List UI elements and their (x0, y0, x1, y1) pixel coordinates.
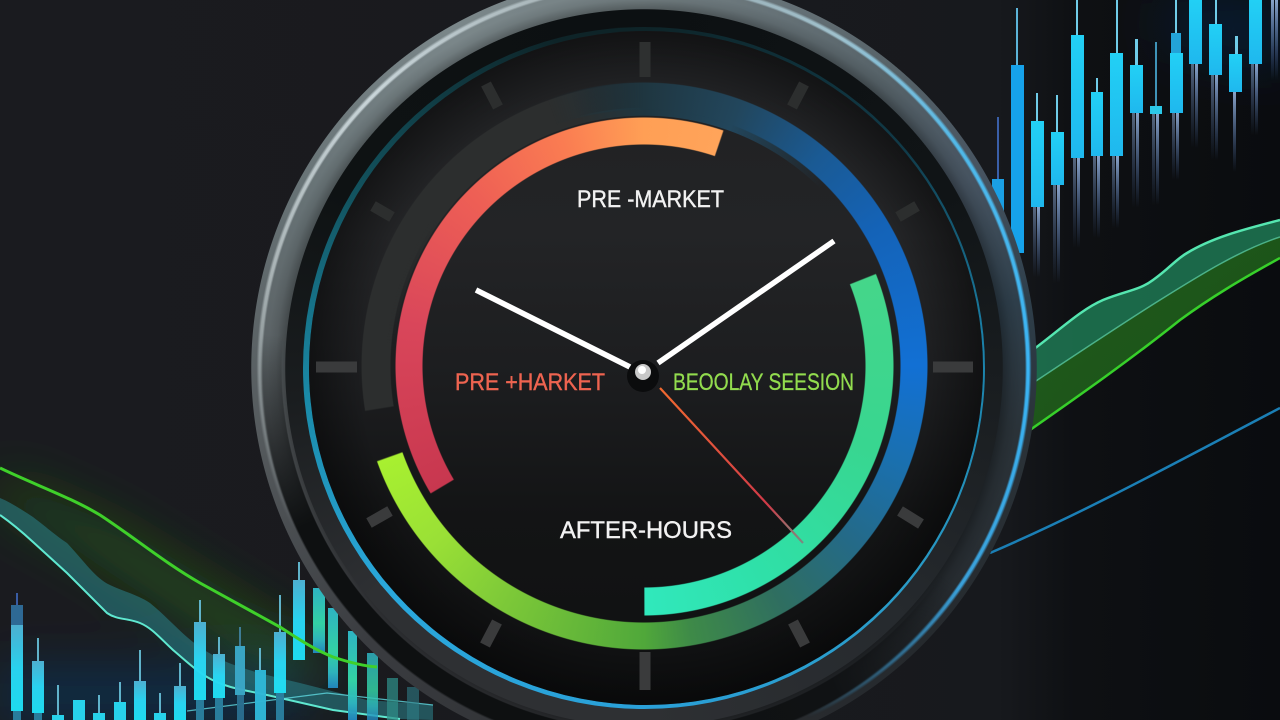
dial: minute hand (476, 290, 630, 367)
chart: right green trend band (1030, 220, 1280, 430)
chart: right blue trend line (990, 408, 1280, 553)
chart: bottom left candlesticks (11, 562, 419, 720)
label: top pre-market: PRE -MARKET (577, 186, 724, 213)
clock: teal inner ring (303, 27, 985, 709)
dial: hour hand (658, 241, 834, 363)
chart: left green trend line (0, 468, 377, 667)
label: regular session: BEOOLAY SEESION (673, 369, 854, 396)
chart: top right candlesticks (992, 0, 1278, 283)
clock: rim highlight (250, 0, 1038, 720)
chart: top right glow (1160, 0, 1280, 70)
clock: dial face (309, 31, 983, 705)
clock: outer steel rim (250, 0, 1038, 720)
dial: gray track arc (362, 92, 582, 411)
clock: dial edge vignette (309, 31, 983, 705)
clock: inner dark bezel (285, 9, 1002, 720)
label: left pre-market: PRE +HARKET (455, 369, 605, 396)
dial: second hand (660, 388, 803, 543)
dial: center hub (627, 360, 659, 392)
dial: pre-market arc red to orange (395, 117, 724, 494)
dial: after-hours arc green to teal (644, 274, 894, 616)
dial: hands, ticks and labels (316, 42, 973, 690)
dial: outer session arc blue to lime (358, 80, 930, 652)
dial: upper track inner extension (422, 110, 812, 247)
clock (251, 0, 1037, 720)
chart: bottom left glow (0, 480, 340, 720)
label: after-hours: AFTER-HOURS (560, 517, 732, 544)
chart: left teal trend band (0, 498, 433, 720)
clock: lower rim dark band (260, 350, 950, 720)
clock: rim bevel shading (250, 0, 1038, 720)
dial: hour ticks (316, 42, 973, 690)
